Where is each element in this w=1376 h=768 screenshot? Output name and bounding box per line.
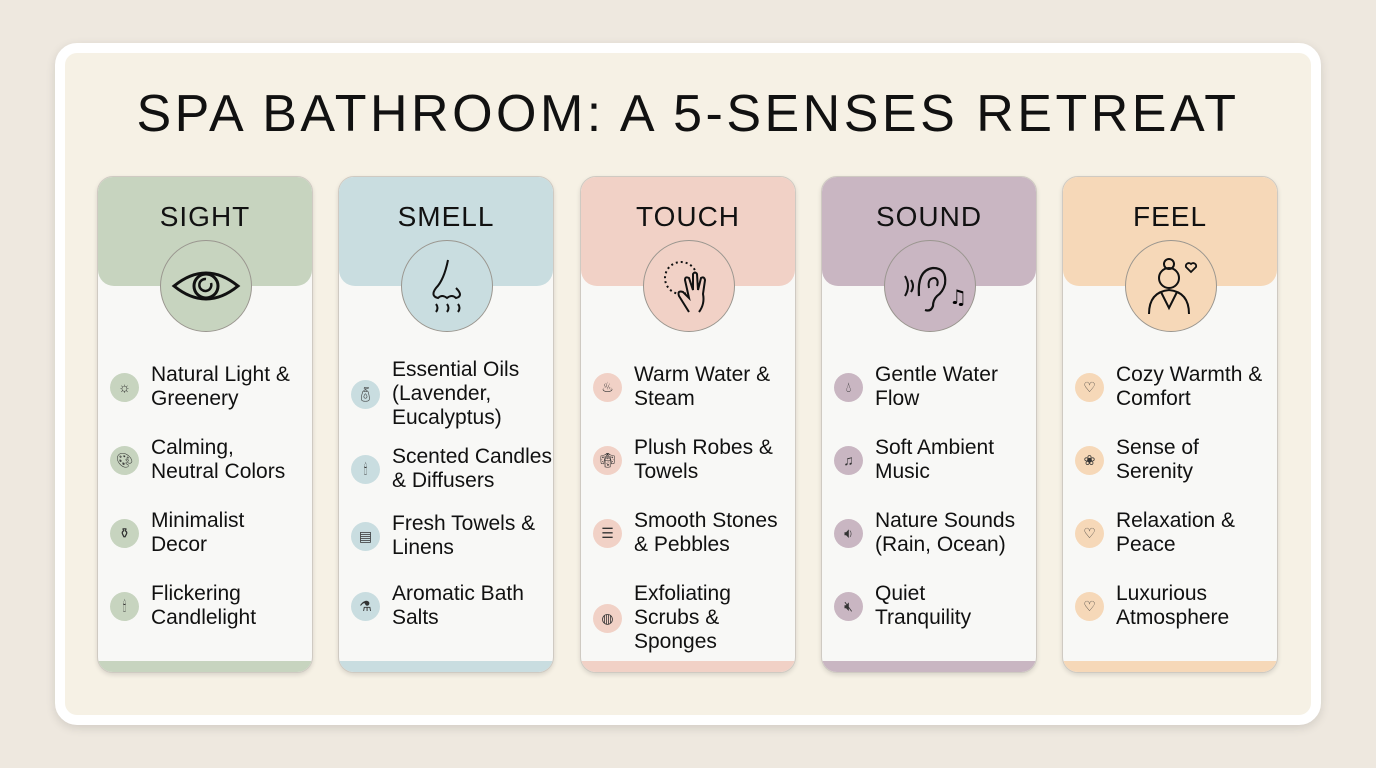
item: scrubs — [593, 582, 731, 653]
item: music: Music — [875, 460, 930, 483]
item: scrubs: Exfoliating — [634, 582, 731, 605]
icon: person with heart — [1125, 240, 1217, 332]
item: calming colors: Neutral Colors — [151, 460, 285, 483]
item: essential oils — [351, 358, 519, 429]
item: minimalist decor: Decor — [151, 533, 207, 556]
item: music — [834, 436, 994, 483]
icon: nose — [401, 240, 493, 332]
item: towels: Fresh Towels & — [392, 512, 535, 535]
item: towels: Linens — [392, 536, 454, 559]
item: music: Soft Ambient — [875, 436, 994, 459]
item: natural light: Natural Light & — [151, 363, 290, 386]
item: bath salts — [351, 582, 524, 629]
item: candlelight: Candlelight — [151, 606, 256, 629]
item: cozy warmth: Comfort — [1116, 387, 1191, 410]
panel: feel: FEEL — [1133, 201, 1207, 232]
item: essential oils: (Lavender, — [392, 382, 491, 405]
panel: smell: SMELL — [398, 201, 494, 232]
item: luxurious — [1075, 582, 1229, 629]
item: minimalist decor — [110, 509, 244, 556]
item: stones: & Pebbles — [634, 533, 730, 556]
item: luxurious: Atmosphere — [1116, 606, 1229, 629]
item: candles: & Diffusers — [392, 469, 494, 492]
item: water flow — [834, 363, 998, 410]
item: calming colors: Calming, — [151, 436, 234, 459]
item: cozy warmth: ♡ — [1083, 379, 1096, 395]
item: calming colors: 🎨︎ — [116, 452, 133, 468]
item: candles — [351, 445, 552, 492]
item: warm water — [593, 363, 770, 410]
icon: eye — [160, 240, 252, 332]
item: scrubs: ◍ — [601, 610, 614, 626]
item: natural light: ☼ — [118, 379, 131, 395]
item: minimalist decor: ⚱ — [119, 525, 130, 541]
item: cozy warmth: Cozy Warmth & — [1116, 363, 1262, 386]
item: scrubs: Scrubs & — [634, 606, 719, 629]
item: candles: Scented Candles — [392, 445, 552, 468]
item: nature sounds — [834, 509, 1015, 556]
item: bath salts: ⚗ — [359, 598, 372, 614]
item: towels — [351, 512, 535, 559]
panel: sound: SOUND — [876, 201, 982, 232]
panel: sight — [97, 176, 313, 673]
icon: ear — [884, 240, 976, 332]
item: natural light — [110, 363, 290, 410]
item: relaxation: ♡ — [1083, 525, 1096, 541]
item: warm water: ♨ — [601, 379, 614, 395]
panel: touch: TOUCH — [636, 201, 740, 232]
item: candlelight: Flickering — [151, 582, 241, 605]
item: essential oils: Eucalyptus) — [392, 406, 502, 429]
item: candlelight — [110, 582, 256, 629]
item: bath salts: Salts — [392, 606, 439, 629]
item: essential oils: Essential Oils — [392, 358, 519, 381]
panel: smell — [338, 176, 554, 673]
panel: feel — [1062, 176, 1278, 673]
item: bath salts: Aromatic Bath — [392, 582, 524, 605]
item: essential oils: 🧴︎ — [357, 386, 374, 402]
item: candles: 🕯︎ — [364, 461, 367, 477]
item: serenity: Sense of — [1116, 436, 1199, 459]
item: warm water: Warm Water & — [634, 363, 770, 386]
item: quiet: 🔇︎ — [844, 598, 853, 614]
item: nature sounds: Nature Sounds — [875, 509, 1015, 532]
item: luxurious: ♡ — [1083, 598, 1096, 614]
item: robes: Plush Robes & — [634, 436, 773, 459]
item: robes — [593, 436, 773, 483]
item: robes: Towels — [634, 460, 698, 483]
item: serenity — [1075, 436, 1199, 483]
item: water flow: 💧︎ — [846, 379, 851, 395]
panel: touch — [580, 176, 796, 673]
item: warm water: Steam — [634, 387, 695, 410]
item: serenity: ❀ — [1084, 452, 1095, 468]
item: relaxation: Relaxation & — [1116, 509, 1235, 532]
item: water flow: Gentle Water — [875, 363, 998, 386]
item: calming colors — [110, 436, 285, 483]
item: minimalist decor: Minimalist — [151, 509, 244, 532]
item: nature sounds: 🔉︎ — [844, 525, 853, 541]
item: stones: ☰ — [601, 525, 614, 541]
item: relaxation — [1075, 509, 1235, 556]
item: luxurious: Luxurious — [1116, 582, 1207, 605]
item: stones — [593, 509, 778, 556]
item: cozy warmth — [1075, 363, 1262, 410]
item: towels: ▤ — [359, 528, 372, 544]
item: robes: 👘︎ — [599, 452, 616, 468]
item: stones: Smooth Stones — [634, 509, 778, 532]
item: nature sounds: (Rain, Ocean) — [875, 533, 1006, 556]
item: scrubs: Sponges — [634, 630, 717, 653]
panel: sound — [821, 176, 1037, 673]
item: natural light: Greenery — [151, 387, 239, 410]
panel: sight: SIGHT — [160, 201, 250, 232]
title: SPA BATHROOM: A 5-SENSES RETREAT — [136, 85, 1240, 143]
item: candlelight: 🕯︎ — [122, 598, 126, 614]
item: quiet: Tranquility — [875, 606, 971, 629]
item: music: ♫ — [843, 452, 854, 468]
item: water flow: Flow — [875, 387, 919, 410]
item: quiet: Quiet — [875, 582, 925, 605]
item: relaxation: Peace — [1116, 533, 1176, 556]
item: quiet — [834, 582, 971, 629]
item: serenity: Serenity — [1116, 460, 1193, 483]
icon: hand — [643, 240, 735, 332]
